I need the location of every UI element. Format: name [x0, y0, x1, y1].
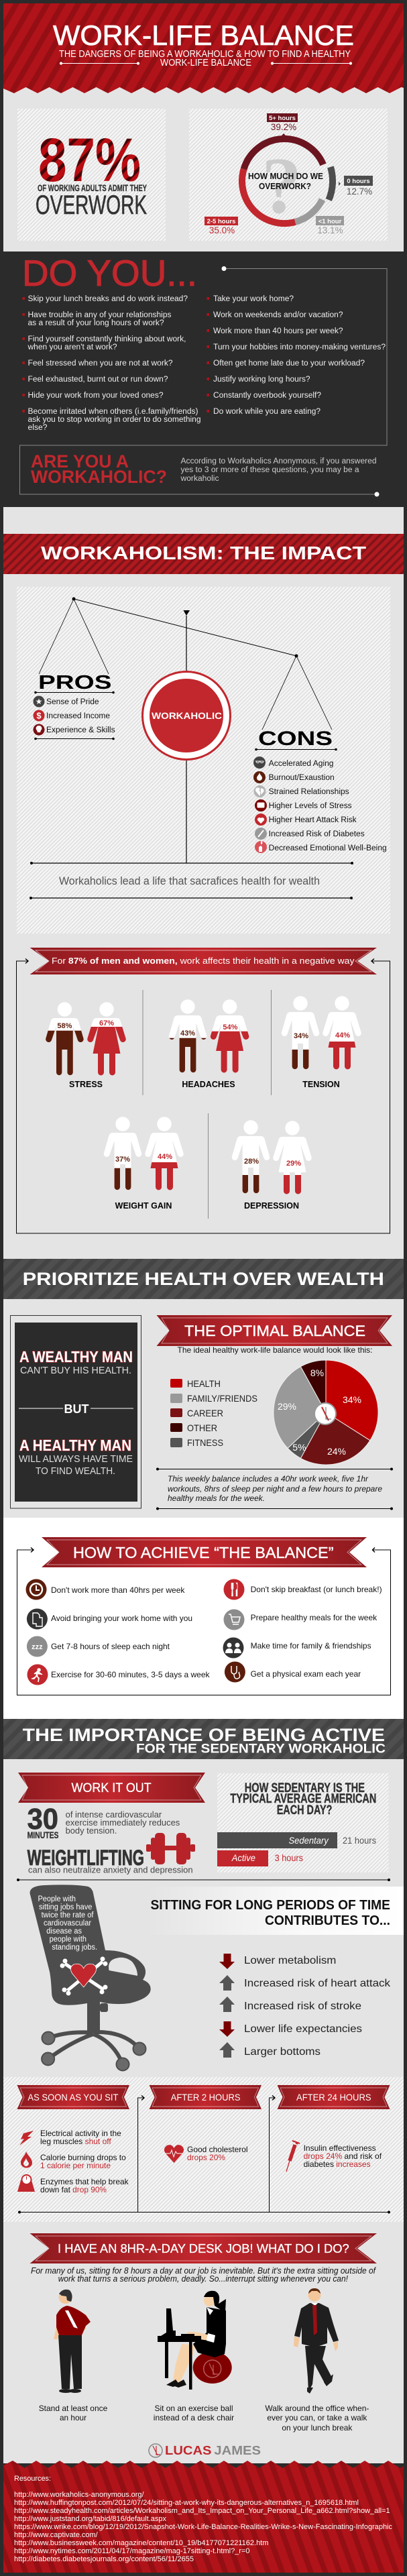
icon: weighing scale: [17, 2175, 35, 2192]
desk job section background: [3, 2222, 404, 2463]
weekly balance note: [156, 1467, 393, 1510]
figures: weight gain: 37%: [115, 1156, 130, 1164]
pros list: $: [36, 711, 42, 720]
logo: lucas james: LUCAS: [165, 2444, 212, 2457]
pros heading: [34, 672, 115, 740]
weightlifting stat: can also neutralize anxiety and depression: [28, 1866, 193, 1875]
heading: are you a workaholic: ARE YOU A: [31, 451, 129, 471]
cons list: Decreased Emotional Well-Being: [269, 844, 387, 852]
pie legend: CAREER: [187, 1408, 223, 1418]
figures: weight gain: [104, 1117, 184, 1211]
label under 1 hour: [316, 216, 344, 235]
tip icons left: zzz: [32, 1643, 43, 1651]
figures: tension: [282, 996, 361, 1089]
desk job intro: For many of us, sitting for 8 hours a day at our job is inevitable. But it's the extra sitting outside of: [31, 2266, 376, 2276]
question list right column: [207, 295, 386, 416]
chair text: cardiovascular: [44, 1919, 91, 1927]
weekly balance note: This weekly balance includes a 40hr work week, five 1hr: [168, 1474, 369, 1483]
label 2-5 hours: 35.0%: [209, 225, 235, 235]
label 5+ hours: 39.2%: [271, 122, 296, 132]
footer: resources: https://www.wrike.com/blog/12/19/2012/Snapshot-Work-Life-Balance-Realities-Wrike-s-New-Fascinating-Infographic: [14, 2523, 392, 2531]
figures: weight gain: 44%: [158, 1153, 172, 1161]
thirty minutes stat: MINUTES: [27, 1830, 59, 1840]
panel: how sedentary: HOW SEDENTARY IS THE: [245, 1781, 365, 1795]
logo: lucas james: JAMES: [214, 2444, 261, 2457]
chair text: people with: [50, 1936, 86, 1944]
banner: prioritize health over wealth: [3, 1259, 404, 1299]
question list left column: [23, 295, 201, 432]
question list left column: when you aren't at work?: [27, 343, 117, 351]
ribbon: 8hr desk job: I HAVE AN 8HR-A-DAY DESK JOB! WHAT DO I DO?: [58, 2242, 349, 2255]
label 0 hours: [344, 176, 373, 197]
tip text: Exercise for 30-60 minutes, 3-5 days a week: [51, 1670, 210, 1679]
as soon as you sit text: Enzymes that help break: [40, 2177, 129, 2186]
pie chart: 29%: [278, 1401, 296, 1412]
label under 1 hour: <1 hour: [318, 218, 342, 225]
question list left column: ask you to stop working in order to do something: [28, 416, 201, 424]
ribbon: after 2 hours: AFTER 2 HOURS: [171, 2092, 240, 2103]
pros list: Increased Income: [46, 712, 110, 720]
dividers: [143, 990, 271, 1219]
question list left column: as a result of your long hours of work?: [28, 319, 164, 327]
banner: workaholism the impact: [3, 534, 404, 574]
pie chart: 5%: [292, 1442, 306, 1453]
captions: Sit on an exercise ball: [154, 2404, 233, 2413]
cons list: Higher Heart Attack Risk: [269, 816, 357, 824]
icon: heart and crossbones: [60, 1957, 107, 1996]
question list left column: else?: [28, 424, 47, 432]
bar: sedentary: 21 hours: [343, 1835, 376, 1846]
heading: sitting for long periods: SITTING FOR LONG PERIODS OF TIME: [150, 1898, 390, 1913]
after 24 hours text: Insulin effectiveness: [304, 2143, 376, 2153]
bar: active: Active: [231, 1852, 255, 1863]
as soon as you sit text: 1 calorie per minute: [40, 2161, 111, 2170]
illustration: standing man: [54, 2290, 91, 2393]
desk job intro: work that turns a serious problem, deadly. So...interrupt sitting whenever you can!: [58, 2274, 348, 2284]
intro line: The ideal healthy work-life balance would look like this:: [177, 1345, 373, 1355]
pie chart: 24%: [327, 1446, 346, 1457]
figures: depression: 28%: [244, 1158, 259, 1166]
cons list: Accelerated Aging: [269, 760, 334, 768]
pie legend: OTHER: [187, 1422, 217, 1433]
thirty minutes stat: body tension.: [66, 1826, 117, 1836]
frame line: [20, 266, 387, 496]
ribbon: after 24 hours: [278, 2085, 390, 2109]
captions: an hour: [60, 2413, 86, 2422]
bar: active: [217, 1850, 303, 1866]
cons heading: [255, 728, 337, 750]
tip text: Don't skip breakfast (or lunch break!): [251, 1585, 382, 1594]
thirty minutes stat: 30: [27, 1803, 58, 1836]
after 2 hours text: [187, 2145, 248, 2162]
footer: resources: http://diabetes.diabetesjournals.org/content/56/11/2655: [14, 2555, 194, 2563]
ribbon: work it out: WORK IT OUT: [71, 1781, 152, 1795]
panel: how sedentary: [217, 1773, 389, 1872]
heading: are you a workaholic: WORKAHOLIC?: [31, 467, 167, 487]
donut centre label: OVERWORK?: [259, 182, 311, 191]
scale beam and stand: [31, 599, 352, 898]
banner: workaholism the impact: WORKAHOLISM: THE IMPACT: [41, 543, 366, 563]
figures: headaches: [169, 999, 249, 1089]
tip text: [51, 1585, 382, 1679]
chair text: People with: [38, 1895, 76, 1903]
question list left column: Feel exhausted, burnt out or run down?: [28, 376, 168, 384]
subtitle: WORK-LIFE BALANCE: [160, 57, 251, 68]
tip text: Avoid bringing your work home with you: [51, 1614, 192, 1623]
after 2 hours text: drops 20%: [187, 2153, 225, 2162]
captions: Stand at least once: [39, 2404, 108, 2413]
ribbon: how to achieve the balance: [42, 1537, 367, 1567]
heading: are you a workaholic: [31, 451, 167, 487]
workaholics anonymous note: According to Workaholics Anonymous, if you answered: [181, 457, 377, 465]
question list left column: Have trouble in any of your relationships: [28, 311, 172, 319]
banner: importance of being active: [3, 1719, 404, 1759]
question list left column: Skip your lunch breaks and do work instead?: [28, 295, 188, 303]
weightlifting stat: WEIGHTLIFTING: [27, 1846, 144, 1870]
pros list: Experience & Skills: [46, 726, 115, 734]
panel: pros and cons scale: [17, 587, 390, 934]
figures: headaches: 43%: [180, 1029, 195, 1038]
tip text: Make time for family & friendships: [251, 1641, 371, 1650]
label 5+ hours: [267, 113, 298, 132]
panel: wealthy man quote: A WEALTHY MAN: [19, 1348, 133, 1365]
workaholics anonymous note: [180, 457, 377, 483]
question list right column: Work more than 40 hours per week?: [213, 327, 343, 335]
captions: [39, 2404, 369, 2432]
donut ring: [242, 139, 333, 223]
thirty minutes stat: of intense cardiovascular: [66, 1810, 162, 1819]
as soon as you sit text: leg muscles shut off: [40, 2137, 111, 2146]
subtitle: [59, 48, 351, 68]
tip text: Prepare healthy meals for the week: [251, 1613, 377, 1622]
label under 1 hour: 13.1%: [317, 225, 343, 235]
figures: stress: [46, 1002, 126, 1089]
as soon as you sit text: Electrical activity in the: [40, 2129, 121, 2138]
cons list: [253, 757, 387, 853]
illustration: walking man: [294, 2288, 339, 2394]
figures: stress: STRESS: [69, 1080, 103, 1089]
workaholic circle: WORKAHOLIC: [152, 710, 222, 721]
big number 87%: 87%: [38, 126, 141, 194]
donut centre label: HOW MUCH DO WE: [248, 172, 323, 181]
footer: resources: Resources:: [14, 2475, 51, 2483]
footer: resources: http://www.captivate.com/: [14, 2531, 99, 2539]
icon: heart with pulse: [164, 2145, 184, 2163]
captions: instead of a desk chair: [154, 2413, 234, 2422]
bar: sedentary: [217, 1832, 376, 1848]
weekly balance note: workouts, 8hrs of sleep per night and a few hours to prepare: [168, 1484, 382, 1494]
figures: depression: [232, 1120, 312, 1211]
title: WORK-LIFE BALANCE: [53, 19, 354, 51]
label 2-5 hours: [205, 217, 238, 235]
ribbon: the optimal balance: [157, 1315, 392, 1346]
subtitle: THE DANGERS OF BEING A WORKAHOLIC & HOW TO FIND A HEALTHY: [59, 48, 351, 60]
chair text: [38, 1895, 97, 1952]
figures: depression: 29%: [286, 1160, 301, 1168]
header banner: [3, 3, 404, 93]
heading: sitting for long periods: [146, 1887, 404, 1935]
icon: office chair: [30, 1885, 151, 2071]
sitting effects list: [219, 1954, 391, 2058]
footer: resources: http://www.nytimes.com/2011/04/17/magazine/mag-17sitting-t.html?_r=0: [14, 2547, 249, 2555]
icon: dumbbell: [146, 1833, 195, 1864]
after 24 hours text: [304, 2143, 382, 2169]
label 0 hours: 0 hours: [347, 178, 370, 185]
footer: resources: http://www.huffingtonpost.com/2012/07/24/sitting-at-work-why-its-dangerous-alternatives_n_1695618.html: [14, 2499, 359, 2507]
timeline connectors: [19, 2095, 389, 2212]
panel: wealthy man quote: [11, 1316, 141, 1508]
ribbon: as soon as you sit: [17, 2085, 129, 2109]
figures: headaches: HEADACHES: [182, 1080, 235, 1089]
illustration: woman on exercise ball: [158, 2291, 232, 2390]
desk job intro: [31, 2266, 376, 2284]
question list right column: Often get home late due to your workload?: [213, 359, 365, 368]
panel: wealthy man quote: A HEALTHY MAN: [19, 1437, 131, 1454]
workaholics anonymous note: yes to 3 or more of these questions, you may be a: [181, 466, 359, 474]
sitting effects list: Increased risk of stroke: [244, 2001, 361, 2012]
as soon as you sit text: [40, 2129, 129, 2194]
footer: resources: [3, 2461, 404, 2573]
panel: wealthy man quote: BUT: [64, 1402, 89, 1416]
sitting effects list: Lower life expectancies: [244, 2023, 362, 2035]
footer: resources: http://www.workaholics-anonymous.org/: [14, 2491, 145, 2499]
footer: resources: http://www.steadyhealth.com/articles/Workaholism_and_Its_Impact_on_Your_Personal_Life_a662.html?show_all=1: [14, 2507, 390, 2515]
panel: 87 percent statistic: [17, 109, 166, 241]
question list right column: Turn your hobbies into money-making ventures?: [213, 343, 386, 351]
cons list: Burnout/Exaustion: [269, 774, 335, 782]
thirty minutes stat: [27, 1803, 180, 1840]
heading: do you: DO YOU...: [22, 252, 197, 294]
ribbon: after 2 hours: [150, 2085, 261, 2109]
cons heading: CONS: [258, 728, 333, 750]
chair text: sitting jobs have: [39, 1903, 92, 1911]
frame with arrows around figures: [16, 959, 390, 1233]
after 24 hours text: drops 24% and risk of: [304, 2151, 382, 2161]
figures: stress: 58%: [57, 1022, 72, 1030]
question list left column: Become irritated when others (i.e.family/friends): [28, 408, 198, 416]
sitting effects list: Increased risk of heart attack: [244, 1978, 391, 1989]
chair text: disease as: [46, 1927, 82, 1936]
pros list: ★: [36, 697, 42, 706]
question list right column: Justify working long hours?: [213, 376, 310, 384]
question list left column: Feel stressed when you are not at work?: [28, 359, 173, 368]
banner: importance of being active: FOR THE SEDENTARY WORKAHOLIC: [136, 1742, 386, 1756]
panel: how sedentary: EACH DAY?: [277, 1803, 333, 1817]
question list right column: Take your work home?: [213, 295, 294, 303]
question list left column: Hide your work from your loved ones?: [28, 392, 164, 400]
divider: [17, 1879, 390, 1881]
ribbon: 87 percent of men and women: [30, 948, 377, 974]
tip text: Don't work more than 40hrs per week: [51, 1585, 185, 1595]
workaholics anonymous note: workaholic: [180, 475, 219, 483]
pie legend: FAMILY/FRIENDS: [187, 1393, 257, 1404]
after 24 hours text: diabetes increases: [304, 2160, 371, 2169]
bar: sedentary: Sedentary: [288, 1835, 329, 1846]
balance section background: [3, 1299, 404, 1518]
intro section background: [3, 84, 404, 251]
figures: weight gain: WEIGHT GAIN: [115, 1201, 172, 1211]
cons list: Increased Risk of Diabetes: [269, 830, 365, 838]
donut centre label: [248, 172, 323, 191]
captions: ever you can, or take a walk: [267, 2413, 367, 2422]
figures: tension: 44%: [335, 1031, 350, 1040]
weekly balance note: healthy meals for the week.: [168, 1494, 265, 1503]
ribbon: after 24 hours: AFTER 24 HOURS: [296, 2092, 371, 2103]
figures: tension: TENSION: [302, 1080, 340, 1089]
figures: tension: 34%: [294, 1032, 308, 1040]
ribbon: how to achieve the balance: HOW TO ACHIEVE “THE BALANCE”: [73, 1544, 333, 1561]
pie legend: HEALTH: [187, 1378, 221, 1389]
ribbon: 8hr desk job: [30, 2233, 377, 2263]
figures: headaches: 54%: [223, 1023, 238, 1031]
pros list: Sense of Pride: [46, 698, 99, 706]
caption: OF WORKING ADULTS ADMIT THEY: [38, 183, 147, 193]
after 2 hours text: Good cholesterol: [187, 2145, 248, 2154]
question list left column: Find yourself constantly thinking about work,: [28, 335, 186, 343]
banner: prioritize health over wealth: PRIORITIZE HEALTH OVER WEALTH: [23, 1269, 384, 1289]
figures: depression: DEPRESSION: [244, 1201, 299, 1211]
thirty minutes stat: exercise immediately reduces: [66, 1818, 180, 1828]
icon: lightning bolt: [19, 2131, 34, 2145]
heading: sitting for long periods: CONTRIBUTES TO...: [265, 1913, 390, 1928]
panel: how much do we overwork donut chart: [189, 109, 388, 241]
workaholic circle: [141, 671, 231, 761]
pie chart: [274, 1360, 378, 1465]
pie chart: 8%: [310, 1367, 324, 1378]
pros heading: PROS: [38, 672, 111, 693]
panel: wealthy man quote: TO FIND WEALTH.: [36, 1465, 115, 1477]
label 2-5 hours: 2-5 hours: [207, 218, 235, 225]
tip icons left: [25, 1579, 48, 1685]
label 5+ hours: 5+ hours: [269, 115, 296, 122]
as soon as you sit text: down fat drop 90%: [40, 2185, 107, 2194]
panel: wealthy man quote: WILL ALWAYS HAVE TIME: [19, 1453, 133, 1465]
sitting effects list: Lower metabolism: [244, 1955, 336, 1966]
ribbon: as soon as you sit: AS SOON AS YOU SIT: [27, 2092, 119, 2103]
sitting effects list: Larger bottoms: [244, 2046, 321, 2058]
impact section background: [3, 507, 404, 1259]
tip text: Get 7-8 hours of sleep each night: [51, 1642, 170, 1651]
icon: syringe: [286, 2141, 300, 2172]
pie chart: 34%: [343, 1394, 361, 1405]
captions: on your lunch break: [282, 2423, 353, 2432]
captions: Walk around the office when-: [265, 2404, 369, 2413]
panel: wealthy man quote: CAN'T BUY HIS HEALTH.: [20, 1365, 131, 1376]
cons list: Strained Relationships: [269, 788, 349, 796]
question mark: ?: [261, 141, 302, 230]
chair text: twice the rate of: [42, 1911, 94, 1919]
pros list: [34, 696, 115, 735]
pie legend: [170, 1378, 257, 1448]
label 0 hours: 12.7%: [347, 186, 372, 197]
achieve section background: [3, 1518, 404, 1719]
question list right column: Do work while you are eating?: [213, 408, 321, 416]
frame with arrows around tips: [17, 1548, 390, 1695]
overwork word: OVERWORK: [36, 190, 147, 220]
bar: active: 3 hours: [275, 1852, 303, 1863]
ribbon: work it out: [18, 1773, 205, 1803]
ribbon: 87 percent of men and women: For 87% of men and women, work affects their health in a negative way: [52, 956, 355, 966]
cons list: Higher Levels of Stress: [269, 802, 352, 810]
pie legend: FITNESS: [187, 1437, 223, 1448]
question list right column: Work on weekends and/or vacation?: [213, 311, 343, 319]
chair text: standing jobs.: [52, 1944, 97, 1952]
sacrifice statement: Workaholics lead a life that sacrafices health for wealth: [59, 875, 320, 887]
question list right column: Constantly overbook yourself?: [213, 392, 321, 400]
as soon as you sit text: Calorie burning drops to: [40, 2153, 126, 2162]
logo: lucas james: [149, 2444, 261, 2457]
ribbon: the optimal balance: THE OPTIMAL BALANCE: [184, 1323, 365, 1339]
active section background: [3, 1759, 404, 2077]
icon: flame: [21, 2151, 32, 2168]
tip text: Get a physical exam each year: [251, 1669, 361, 1679]
figures: stress: 67%: [99, 1019, 114, 1027]
footer: resources: http://www.juststand.org/tabid/816/default.aspx: [14, 2515, 166, 2523]
banner: importance of being active: THE IMPORTANCE OF BEING ACTIVE: [23, 1725, 385, 1745]
panel: sitting timeline: [3, 2077, 404, 2222]
footer: resources: http://www.businessweek.com/magazine/content/10_19/b4177071221162.htm: [14, 2539, 268, 2547]
tip icons right: [223, 1579, 245, 1682]
